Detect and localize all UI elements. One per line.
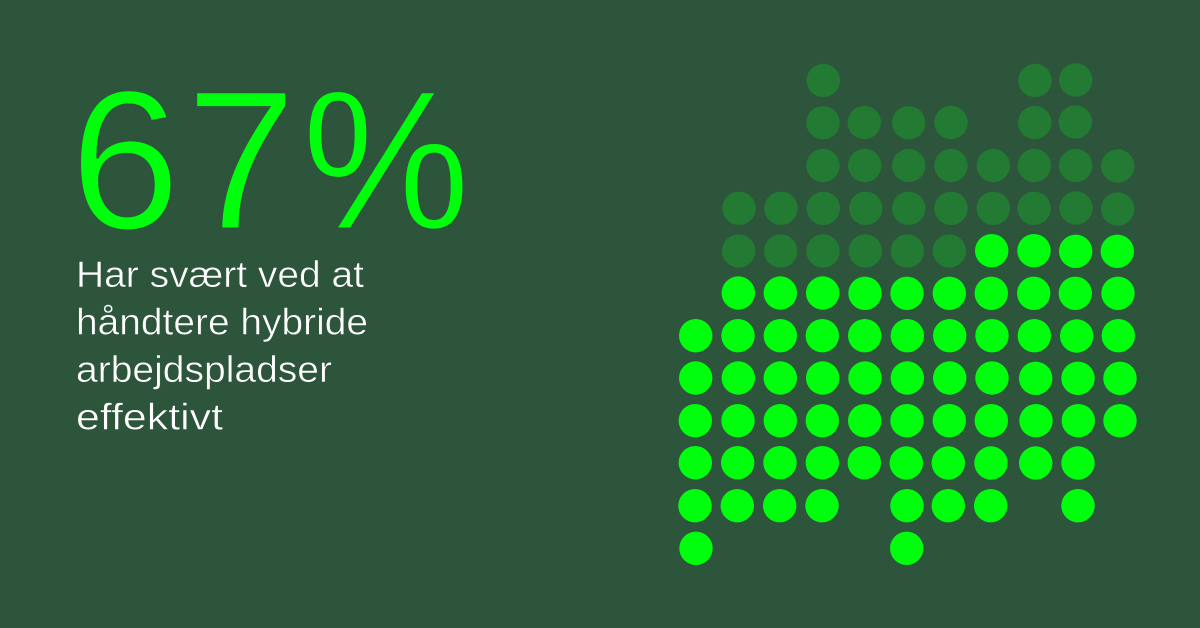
big statistic: 67%: 6 (70, 50, 180, 270)
dot chart: 67% share (bright dots) (678, 234, 1137, 565)
description text: håndtere hybride (76, 302, 368, 342)
big statistic: 67%: 7 (186, 50, 296, 270)
description text: effektivt (76, 396, 224, 438)
description text: arbejdspladser (76, 349, 332, 390)
description text: Har svært ved at (76, 254, 365, 295)
dot chart: remaining share (dim dots) (722, 63, 1134, 268)
big statistic: 67% (70, 50, 470, 271)
description text (76, 254, 368, 438)
big statistic: 67%: % (302, 51, 470, 271)
